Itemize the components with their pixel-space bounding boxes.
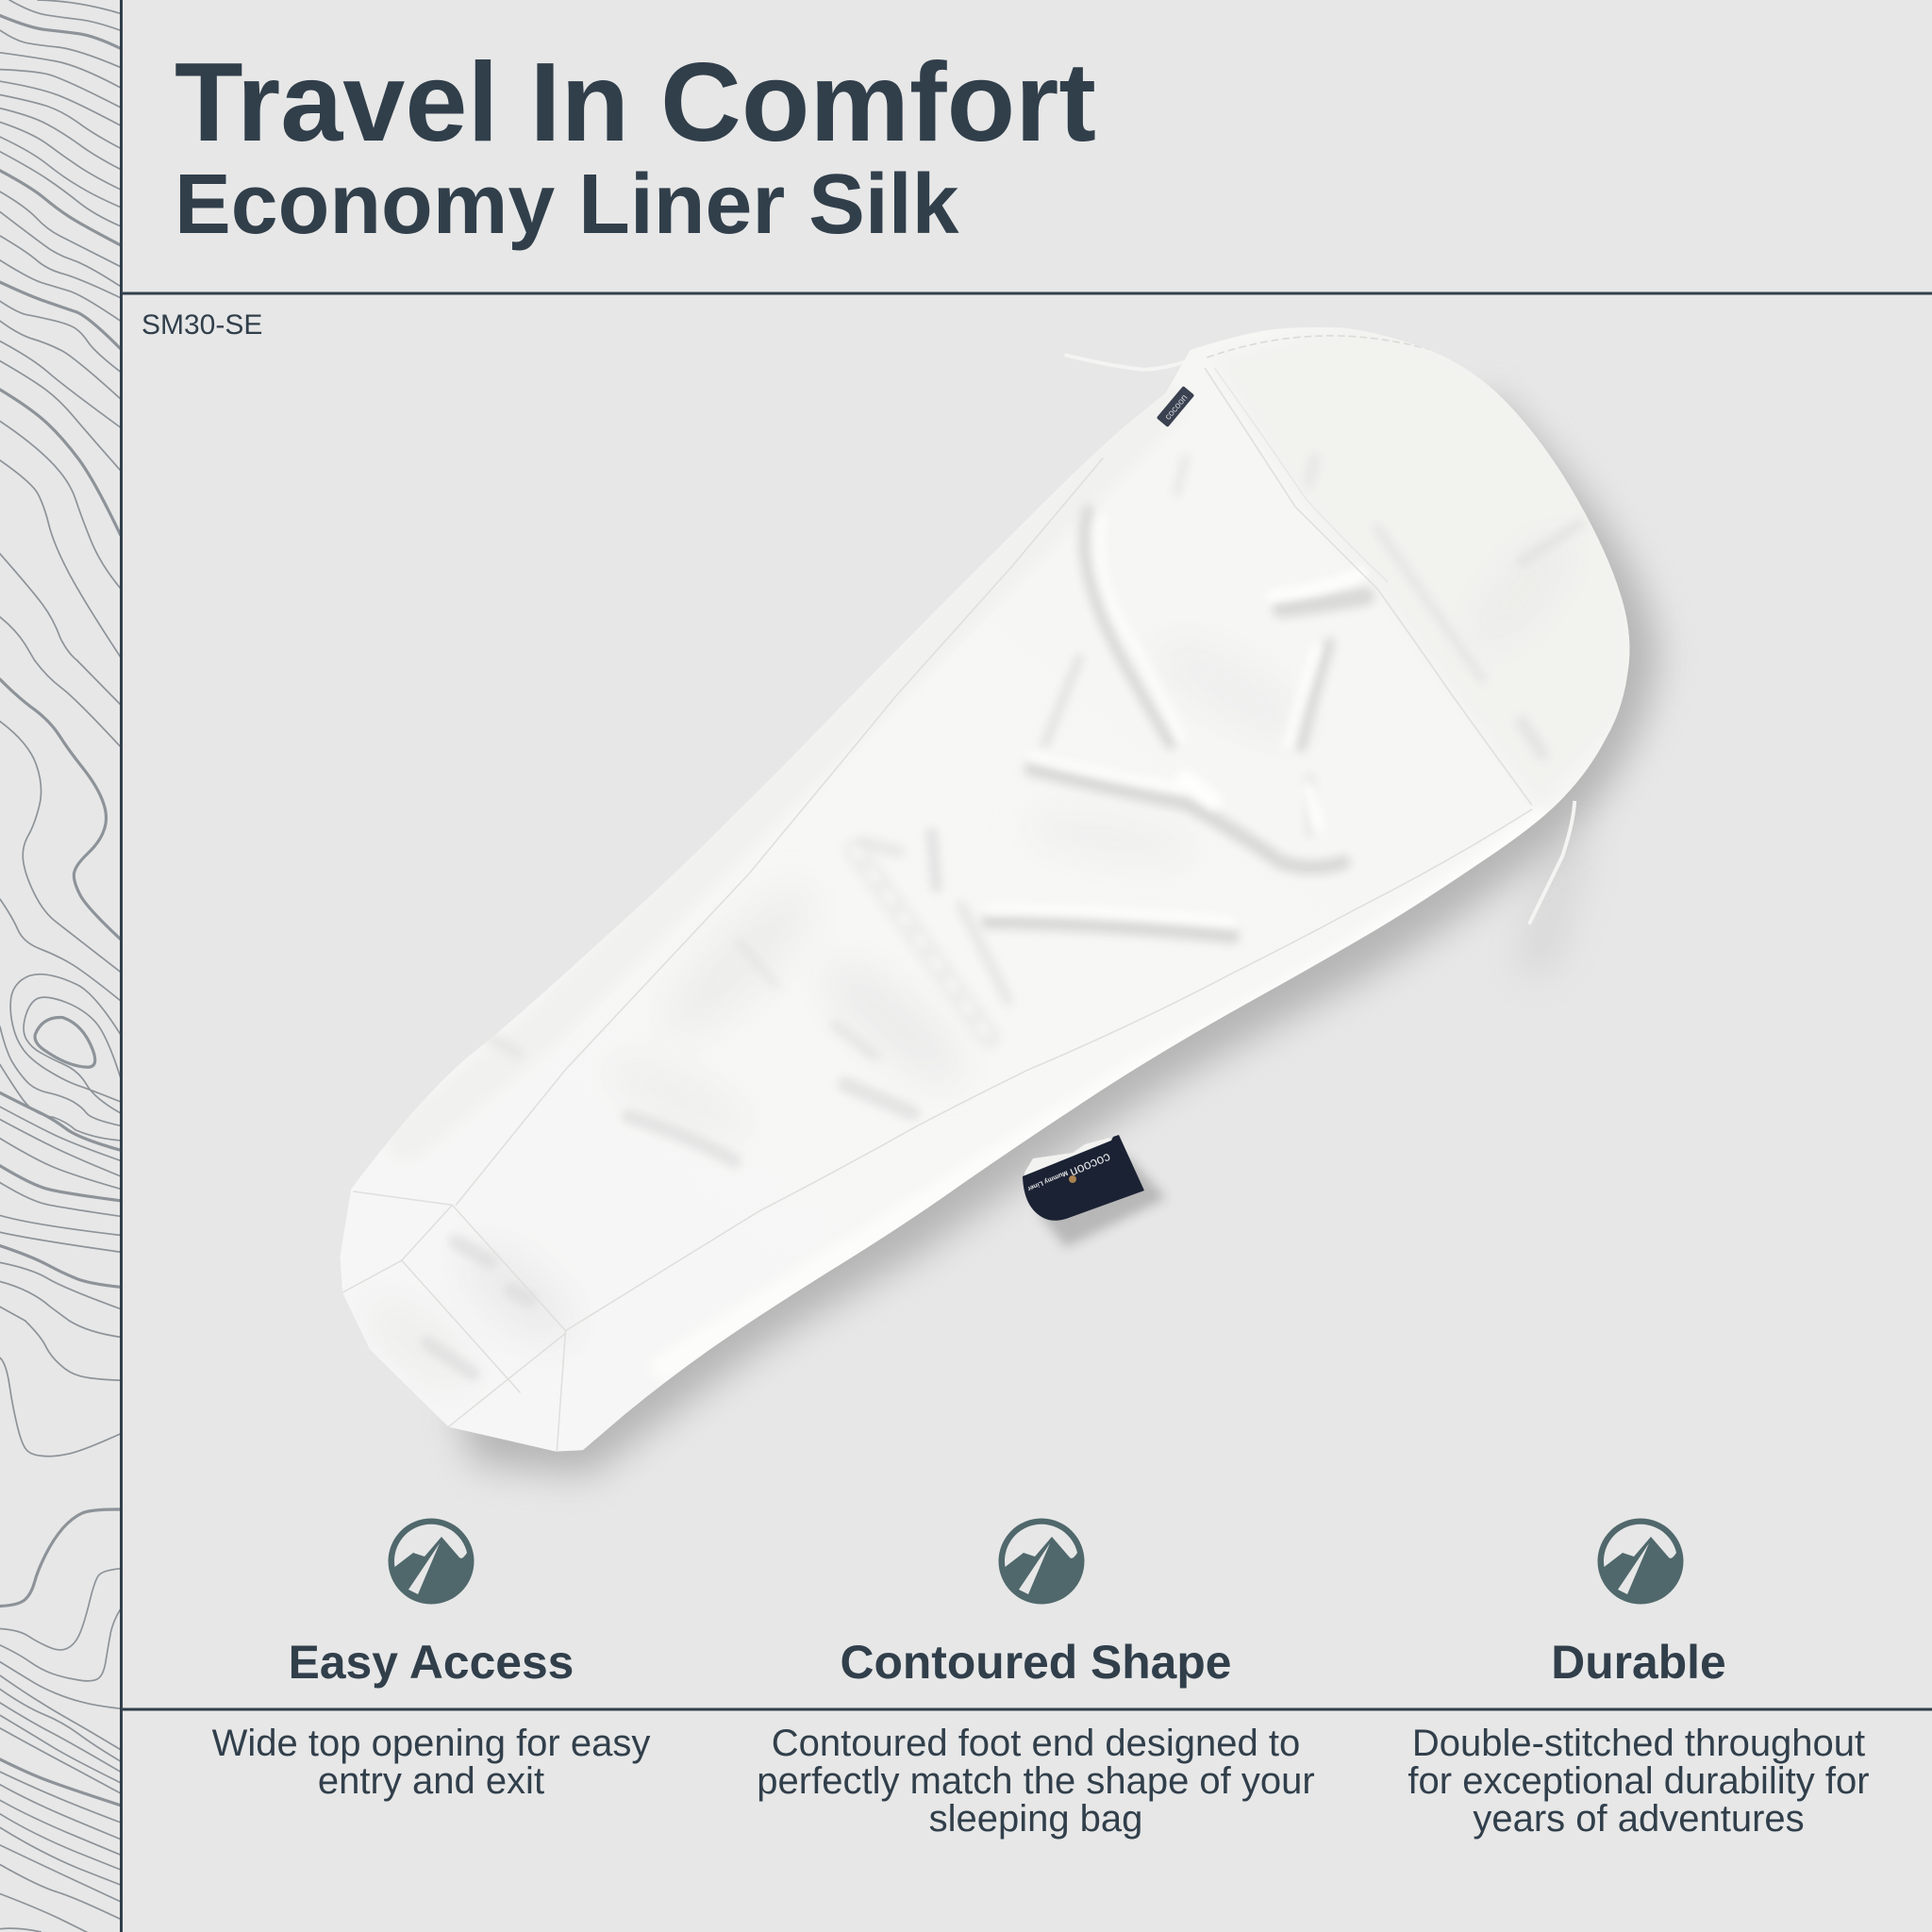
upper side band tone <box>407 407 1164 1140</box>
description: perfectly match the shape of your <box>757 1760 1315 1802</box>
description: Wide top opening for easy <box>212 1723 650 1764</box>
icon: mountain <box>998 1519 1085 1604</box>
feature: durable <box>1407 1519 1870 1840</box>
fabric folds and seams <box>342 326 1632 1450</box>
seams <box>342 336 1614 1450</box>
vertical divider <box>120 0 123 1932</box>
description: years of adventures <box>1473 1798 1805 1840</box>
feature: contoured shape <box>757 1519 1315 1840</box>
heading: Contoured Shape <box>841 1636 1231 1689</box>
description: entry and exit <box>318 1760 544 1802</box>
icon: mountain <box>389 1519 474 1604</box>
cross seam band <box>855 850 990 1038</box>
brand tag: cocoon <box>1163 392 1190 423</box>
icon: mountain <box>1598 1519 1683 1604</box>
hood tint <box>1579 504 1628 720</box>
description: sleeping bag <box>929 1798 1142 1840</box>
soft mottling <box>483 914 938 1324</box>
description: Double-stitched throughout <box>1412 1723 1865 1764</box>
heading: Durable <box>1551 1636 1726 1689</box>
sack shadow <box>1038 1156 1166 1247</box>
subtitle: Economy Liner Silk <box>175 157 959 251</box>
lower hem highlight <box>665 823 1541 1368</box>
brand tag <box>1157 386 1194 427</box>
caption divider <box>122 1707 1932 1711</box>
stuff sack <box>1023 1135 1166 1247</box>
header divider <box>122 292 1932 294</box>
product photo: silk liner <box>340 326 1658 1474</box>
sack label <box>1025 1150 1113 1199</box>
sack label: cocoon <box>1068 1150 1113 1181</box>
liner body <box>340 327 1629 1452</box>
sack liner peek <box>1024 1138 1113 1179</box>
product code: SM30-SE <box>142 309 262 341</box>
description: for exceptional durability for <box>1407 1760 1870 1802</box>
drawstring left <box>1064 355 1201 370</box>
topographic contour pattern <box>0 0 121 1932</box>
feature: easy access <box>212 1519 650 1802</box>
fold shadows <box>427 458 1579 1374</box>
description: Contoured foot end designed to <box>772 1723 1300 1764</box>
title: Travel In Comfort <box>175 40 1096 165</box>
drawstring right <box>1529 801 1574 924</box>
sack body <box>1023 1135 1144 1221</box>
sack badge <box>1069 1175 1076 1183</box>
sack label: Mummy Liner <box>1026 1169 1069 1191</box>
heading: Easy Access <box>289 1636 574 1689</box>
fold highlights <box>991 573 1362 921</box>
liner shadow <box>456 394 1658 1474</box>
